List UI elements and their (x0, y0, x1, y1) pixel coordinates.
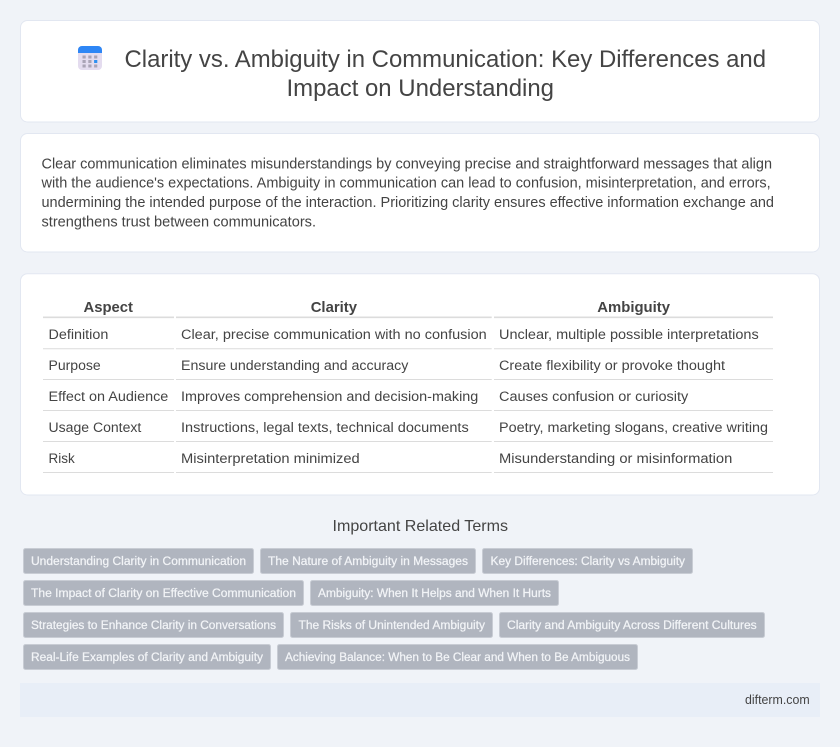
panel: comparison table (20, 274, 820, 495)
table row: usage context: Usage Context (48, 420, 141, 436)
tag (278, 644, 638, 670)
title: Clarity vs. Ambiguity in Communication: Key Differences and (124, 46, 766, 73)
table row: effect on audience: Causes confusion or curiosity (499, 389, 689, 405)
table row: risk (43, 451, 773, 472)
tag (24, 612, 284, 638)
tag: Ambiguity: When It Helps and When It Hurts (318, 586, 551, 600)
panel: title header (20, 20, 820, 122)
tag: Understanding Clarity in Communication (31, 554, 246, 568)
tag: Key Differences: Clarity vs Ambiguity (490, 554, 686, 568)
title (124, 46, 766, 102)
table row: definition (43, 327, 773, 349)
table row: risk: Misinterpretation minimized (181, 451, 360, 467)
tag (260, 548, 476, 574)
table row: purpose: Ensure understanding and accuracy (181, 358, 409, 374)
table header: Clarity (311, 299, 358, 316)
text block: introduction paragraph: with the audience's expectations. Ambiguity in communication can lead to confusion, misinterpretation, and errors, (40, 176, 771, 192)
footer (20, 683, 820, 717)
icon: calendar (78, 46, 102, 70)
tag: The Risks of Unintended Ambiguity (298, 618, 486, 632)
heading: important related terms: Important Related Terms (332, 518, 508, 535)
table row: purpose: Create flexibility or provoke thought (499, 358, 725, 374)
text block: introduction paragraph: Clear communication eliminates misunderstandings by conveying precise and straightforward messages that align (42, 156, 772, 172)
text block: introduction paragraph: undermining the intended purpose of the interaction. Prioritizing clarity ensures effective information exchange and (42, 195, 774, 211)
table row: purpose: Purpose (48, 358, 101, 374)
table row: usage context (43, 420, 773, 442)
text block: introduction paragraph: strengthens trust between communicators. (42, 214, 316, 230)
title: Impact on Understanding (286, 75, 554, 102)
tag (24, 580, 304, 606)
table row: effect on audience (43, 389, 773, 410)
table row: purpose (43, 358, 773, 380)
table row: definition: Definition (48, 327, 108, 343)
table row: risk: Risk (48, 451, 76, 467)
footer source text: difterm.com (745, 692, 810, 707)
table row: risk: Misunderstanding or misinformation (499, 451, 732, 467)
tag: The Impact of Clarity on Effective Communication (31, 586, 296, 600)
tag: Achieving Balance: When to Be Clear and When to Be Ambiguous (285, 650, 630, 664)
tag (500, 612, 764, 638)
tag (310, 580, 558, 606)
tag list: related terms (24, 548, 764, 670)
tag (24, 548, 254, 574)
table row: usage context: Poetry, marketing slogans, creative writing (499, 420, 768, 436)
tag (290, 612, 492, 638)
tag (482, 548, 692, 574)
table header (43, 299, 773, 317)
tag: Clarity and Ambiguity Across Different Cultures (507, 618, 757, 632)
panel: introduction (20, 134, 820, 252)
table row: effect on audience: Improves comprehension and decision-making (181, 389, 478, 405)
table header: Ambiguity (597, 299, 671, 316)
table row: definition: Unclear, multiple possible interpretations (499, 327, 759, 343)
tag (24, 644, 270, 670)
table row: definition: Clear, precise communication with no confusion (181, 327, 487, 343)
tag: The Nature of Ambiguity in Messages (268, 554, 468, 568)
text block: introduction paragraph (40, 156, 774, 230)
tag: Strategies to Enhance Clarity in Conversations (31, 618, 276, 632)
table header: Aspect (84, 299, 133, 316)
table row: effect on audience: Effect on Audience (48, 389, 168, 405)
table row: usage context: Instructions, legal texts, technical documents (181, 420, 469, 436)
tag: Real-Life Examples of Clarity and Ambiguity (31, 650, 264, 664)
